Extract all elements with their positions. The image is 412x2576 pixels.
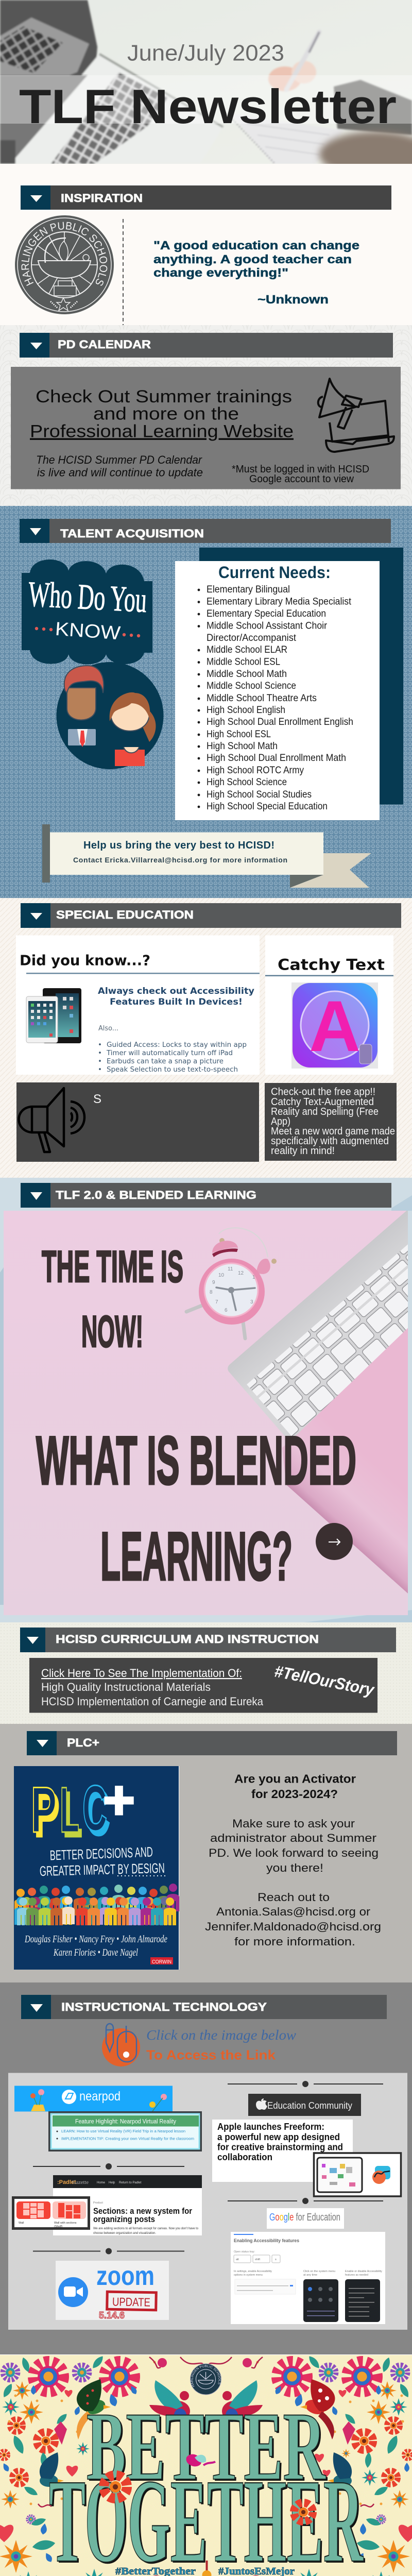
list: open positions: High School English: [207, 705, 285, 716]
headline text: [36, 1242, 356, 1595]
icon: man and woman avatars: [57, 662, 164, 769]
panel: summer trainings: Professional Learning Website: [30, 421, 294, 441]
card: nearpod: LEARN: How to use Virtual Reality (VR) Field Trip in a Nearpod lesson: [61, 2129, 185, 2133]
image: PLC+ book cover: Douglas Fisher • Nancy Frey • John Almarode: [24, 1934, 167, 1945]
card: nearpod: Feature Highlight: Nearpod Virtual Reality: [75, 2119, 176, 2125]
alarm clock: [186, 1228, 277, 1338]
section: talent acquisition: [0, 506, 412, 898]
list: accessibility tips: [98, 1041, 247, 1074]
card: Google for Education: Click on the system menu: [303, 2270, 335, 2273]
list: accessibility tips: •: [98, 1065, 102, 1074]
section header: inspiration: [21, 185, 391, 210]
card: Google for Education: shift: [255, 2258, 261, 2261]
section: instructional technology: [0, 1982, 412, 2355]
logo: Harlingen Public Schools seal: HARLINGEN PUBLIC SCHOOLS: [22, 222, 107, 286]
list: open positions: High School ROTC Army: [207, 765, 304, 776]
panel: catchy text app: Catchy Text: [278, 956, 385, 974]
card: Padlet Gazette: :Padlet: [57, 2179, 76, 2185]
card: Google for Education: s: [275, 2258, 277, 2261]
list: open positions: High School Math: [207, 741, 278, 752]
quote: ~Unknown: [258, 293, 329, 306]
list: open positions: High School Dual Enrollment English: [207, 717, 353, 727]
quote: [153, 239, 359, 306]
bottom floral row: [16, 2569, 393, 2576]
list: open positions: High School Dual Enrollment Math: [207, 753, 346, 764]
card: zoom update: UPDATE: [112, 2295, 150, 2309]
list: open positions: Elementary Bilingual: [207, 584, 290, 595]
section header: instructional technology: INSTRUCTIONAL TECHNOLOGY: [61, 2001, 267, 2013]
alarm clock: 1: [252, 1275, 255, 1280]
section header: curriculum and instruction: HCISD CURRICULUM AND INSTRUCTION: [56, 1633, 319, 1646]
image: iPads: [26, 988, 81, 1043]
alarm clock: 8: [210, 1290, 213, 1295]
panel: catchy text description: Catchy Text-Augmented: [271, 1096, 374, 1108]
card: zoom update: zoom: [96, 2261, 154, 2291]
seal logo: HARLINGEN PUBLIC SCHOOLS: [191, 2365, 221, 2387]
hero photo: laptops, notebook and writing hand: [0, 0, 412, 164]
text block: activator invitation: Jennifer.Maldonado@hcisd.org: [205, 1920, 381, 1933]
panel: current needs: Current Needs:: [218, 563, 331, 582]
section: PD calendar: [0, 325, 412, 506]
text block: activator invitation: Reach out to: [258, 1891, 330, 1904]
list: accessibility tips: •: [98, 1041, 102, 1049]
list: accessibility tips: •: [98, 1057, 102, 1065]
panel: implementation link: HCISD Implementation of Carnegie and Eureka: [41, 1695, 264, 1708]
list: accessibility tips: Timer will automatically turn off iPad: [106, 1049, 233, 1057]
instruction text: Click on the image below: [146, 2027, 296, 2043]
section header: talent acquisition: [20, 519, 391, 543]
card: Google for Education: Enabling Accessibility features: [234, 2238, 299, 2244]
alarm clock: 9: [212, 1280, 215, 1285]
card: Padlet Gazette: Home: [97, 2181, 106, 2184]
icon: catchy text app: [291, 982, 378, 1069]
book title letters: C: [85, 1777, 110, 1849]
section header: PLC+: [27, 1731, 397, 1755]
card: Google for Education: Open status tray:: [234, 2250, 255, 2253]
alarm clock: 6: [225, 1308, 228, 1313]
panel: did you know: [16, 936, 260, 1075]
section: HCISD curriculum and instruction: [0, 1622, 412, 1724]
list: open positions: Elementary Special Education: [207, 608, 326, 619]
list: accessibility tips: •: [98, 1049, 102, 1057]
book title letters: L: [63, 1779, 82, 1851]
book title letters: [31, 1770, 135, 1851]
image: PLC+ book cover: Karen Flories • Dave Nagel: [53, 1947, 138, 1958]
section header: instructional technology: [21, 1995, 387, 2019]
badge: who do you know: Who Do You: [27, 574, 148, 620]
red bird: [300, 2379, 335, 2439]
card: zoom update: [56, 2261, 169, 2320]
image: pink desk with clock and keyboard: [4, 1211, 408, 1615]
list: open positions: Elementary Library Media Specialist: [207, 597, 352, 607]
card: Apple education community: for creative brainstorming and: [217, 2142, 343, 2153]
card: Google for Education: Enable or disable Accessibility: [345, 2270, 382, 2273]
book title letters: +: [103, 1770, 135, 1831]
badge: who do you know: KNOW: [55, 618, 121, 643]
image: PLC+ book cover: [14, 1766, 179, 1970]
quote: change everything!": [153, 266, 288, 279]
panel: summer trainings: and more on the: [93, 404, 239, 423]
text block: activator invitation: you there!: [266, 1861, 323, 1874]
panel: did you know: Features Built In Devices!: [110, 997, 243, 1007]
panel: did you know: Also...: [98, 1024, 118, 1032]
instruction text: [146, 2027, 296, 2063]
keyboard: [228, 1211, 408, 1594]
book title letters: P: [34, 1779, 60, 1851]
panel: current needs: [175, 548, 403, 820]
section header: TLF 2.0 and blended learning: [21, 1183, 391, 1208]
birds: [40, 2379, 352, 2487]
alarm clock: 7: [215, 1299, 218, 1305]
panel: implementation link: High Quality Instructional Materials: [41, 1681, 211, 1693]
card: Padlet Gazette: (Shelf): [54, 2225, 62, 2228]
panel: summer trainings: The HCISD Summer PD Calendar: [36, 453, 203, 466]
crowd of people: [14, 1884, 179, 1925]
flower and bird accents over the lettering: [104, 2454, 313, 2521]
list: accessibility tips: Earbuds can take a snap a picture: [107, 1057, 224, 1065]
panel: implementation link: [29, 1658, 377, 1713]
alarm clock: 10: [218, 1273, 225, 1278]
list: accessibility tips: Speak Selection to use text-to-speech: [107, 1065, 238, 1074]
panel: tech updates: [8, 2073, 407, 2330]
card: Padlet Gazette: [13, 2175, 202, 2235]
section: inspiration: [0, 164, 412, 325]
list: open positions: Director/Accompanist: [207, 633, 297, 643]
card: Apple education community: Apple launches Freeform:: [217, 2122, 324, 2132]
card: Google for Education: In settings, enable Accessibility: [234, 2270, 272, 2273]
panel: catchy text description: App): [271, 1116, 290, 1127]
panel: summer trainings: is live and will continue to update: [37, 466, 203, 479]
panel: catchy text description: specifically with augmented: [271, 1136, 389, 1147]
section: TLF 2.0 and blended learning: [0, 1178, 412, 1622]
newsletter title: TLF Newsletter: [19, 79, 397, 133]
panel: summer trainings: *Must be logged in with HCISD: [232, 464, 369, 475]
section header: curriculum and instruction: [20, 1628, 396, 1652]
list: open positions: [198, 584, 353, 812]
text block: activator invitation: PD. We look forward to seeing: [209, 1846, 379, 1859]
card: nearpod: [14, 2086, 201, 2150]
panel: summer trainings: Check Out Summer trainings: [36, 387, 292, 406]
image: PLC+ book cover: BETTER DECISIONS AND: [49, 1844, 153, 1863]
panel: catchy text description: Reality and Spelling (Free: [271, 1106, 379, 1117]
icon: loudspeaker: [19, 1088, 84, 1152]
section header: PLC+: PLC+: [67, 1736, 99, 1749]
list: open positions: High School ESL: [207, 729, 271, 740]
panel: implementation link: Click Here To See The Implementation Of:: [41, 1667, 242, 1680]
card: Google for Education: at any time: [303, 2274, 317, 2277]
instruction text: To Access the Link: [146, 2047, 276, 2063]
hero banner: [0, 0, 412, 178]
alarm clock: 11: [228, 1266, 233, 1272]
quote: "A good education can change: [153, 239, 359, 252]
section header: special education: SPECIAL EDUCATION: [56, 908, 194, 921]
date line: June/July 2023: [127, 40, 284, 66]
card: Google for Education: [231, 2208, 385, 2324]
section header: inspiration: INSPIRATION: [61, 192, 143, 205]
section: PLC+: [0, 1724, 412, 1982]
translucent title band: [0, 75, 412, 124]
section header: PD calendar: PD CALENDAR: [58, 338, 151, 351]
list: open positions: Middle School Science: [207, 681, 296, 691]
image: PLC+ book cover: GREATER IMPACT BY DESIGN: [39, 1860, 165, 1879]
text block: activator invitation: Are you an Activator: [234, 1772, 356, 1786]
panel: catchy text description: [265, 1083, 397, 1161]
card: nearpod: nearpod: [79, 2089, 121, 2104]
title: Better Together lettering: [49, 2414, 365, 2564]
list: open positions: High School Science: [207, 777, 287, 788]
panel: speaker callout: S: [93, 1092, 101, 1106]
panel: catchy text app: [265, 936, 393, 1075]
card: Padlet Gazette: Product: [93, 2201, 103, 2205]
card: Apple education community: collaboration: [217, 2152, 272, 2162]
quote: anything. A good teacher can: [153, 252, 352, 266]
ribbon banner: contact callout: [42, 824, 371, 888]
headline text: THE TIME IS: [42, 1242, 183, 1292]
card: Google for Education: alt: [236, 2258, 239, 2261]
banner: Better Together: [0, 2354, 412, 2576]
card: Padlet Gazette: Wall with sections: [54, 2222, 77, 2225]
icon: arrow button: [316, 1523, 353, 1560]
alarm clock: 12: [238, 1270, 244, 1276]
list: open positions: Middle School Theatre Arts: [207, 693, 317, 704]
seal logo: [190, 2364, 221, 2395]
card: Apple education community: [212, 2094, 401, 2196]
floral decoration: [0, 2354, 412, 2576]
panel: did you know: Did you know...?: [20, 952, 150, 969]
blue birds: [40, 2452, 352, 2487]
panel: catchy text description: reality in mind!: [271, 1145, 335, 1157]
panel: catchy text description: Meet a new word game made: [271, 1126, 395, 1137]
panel: did you know: Always check out Accessibility: [98, 986, 254, 996]
panel: speaker callout: [16, 1082, 259, 1162]
book title letters: L: [60, 1774, 79, 1846]
section header: TLF 2.0 and blended learning: TLF 2.0 & BLENDED LEARNING: [56, 1189, 256, 1201]
card: zoom update: 5.14.6: [99, 2310, 125, 2320]
text block: activator invitation: [205, 1772, 381, 1948]
text block: activator invitation: for more information.: [234, 1935, 355, 1948]
text block: activator invitation: for 2023-2024?: [251, 1787, 338, 1801]
hashtags: [115, 2567, 295, 2576]
card: Padlet Gazette: Help: [109, 2181, 115, 2184]
panel: summer trainings: Google account to view: [249, 473, 354, 485]
section header: PD calendar: [20, 333, 393, 358]
text block: activator invitation: Make sure to ask your: [232, 1817, 355, 1830]
card: Padlet Gazette: Sections: a new system for: [93, 2206, 192, 2216]
card: Google for Education: Google for Education: [269, 2212, 340, 2223]
logo: Harlingen Public Schools seal: [15, 215, 114, 314]
card: Padlet Gazette: Gazette: [72, 2179, 89, 2185]
icon: pencil and mouse: [102, 2024, 140, 2066]
list: open positions: Middle School Math: [207, 669, 287, 680]
hashtag: #TellOurStory: [273, 1662, 376, 1700]
card: Padlet Gazette: Return to Padlet: [119, 2181, 142, 2184]
panel: summer trainings: [11, 367, 401, 489]
list: open positions: Middle School ESL: [207, 656, 280, 668]
card: Apple education community: Education Community: [267, 2100, 352, 2111]
icon: megaphone on laptop: [318, 379, 394, 452]
alarm clock: 3: [250, 1299, 253, 1305]
headline text: NOW!: [81, 1307, 143, 1357]
card: Padlet Gazette: organizing posts: [93, 2214, 155, 2224]
section header: talent acquisition: TALENT ACQUISITION: [60, 527, 204, 540]
card: Google for Education: features as needed: [345, 2274, 368, 2277]
card: Padlet Gazette: We are adding sections to all formats except for canvas. Now you don't have to: [93, 2227, 198, 2230]
ribbon banner: contact callout: Help us bring the very best to HCISD!: [83, 840, 274, 851]
list: accessibility tips: Guided Access: Locks to stay within app: [107, 1041, 247, 1049]
list: open positions: High School Special Education: [207, 801, 328, 812]
badge: who do you know: [22, 560, 152, 665]
list: open positions: Middle School Assistant Choir: [207, 620, 328, 632]
section header: special education: [21, 903, 401, 928]
central birds: [149, 2380, 263, 2422]
list: open positions: High School Social Studies: [207, 789, 312, 800]
image: PLC+ book cover: CORWIN: [152, 1959, 171, 1965]
book title letters: P: [31, 1774, 57, 1846]
card: nearpod: IMPLEMENTATION TIP: Creating your own Virtual Reality for the classroom: [61, 2136, 194, 2141]
text block: activator invitation: Antonia.Salas@hcisd.org or: [216, 1905, 370, 1918]
icon: guitar: [202, 2561, 211, 2576]
list: open positions: Middle School ELAR: [207, 645, 287, 655]
card: Apple education community: a powerful new app designed: [217, 2132, 340, 2142]
card: Google for Education: options in system menu: [234, 2274, 263, 2277]
icon: catchy text app: A: [309, 986, 360, 1066]
book title letters: C: [82, 1773, 107, 1844]
section: special education: [0, 898, 412, 1178]
card: Padlet Gazette: choose between organization and visualization.: [93, 2231, 156, 2235]
text block: activator invitation: administrator about Summer: [210, 1832, 376, 1844]
card: Padlet Gazette: Wall: [19, 2222, 24, 2225]
green bird: [77, 2379, 111, 2439]
ribbon banner: contact callout: Contact Ericka.Villarreal@hcisd.org for more information: [73, 856, 287, 864]
panel: catchy text description: Check-out the free app!!: [271, 1086, 375, 1097]
